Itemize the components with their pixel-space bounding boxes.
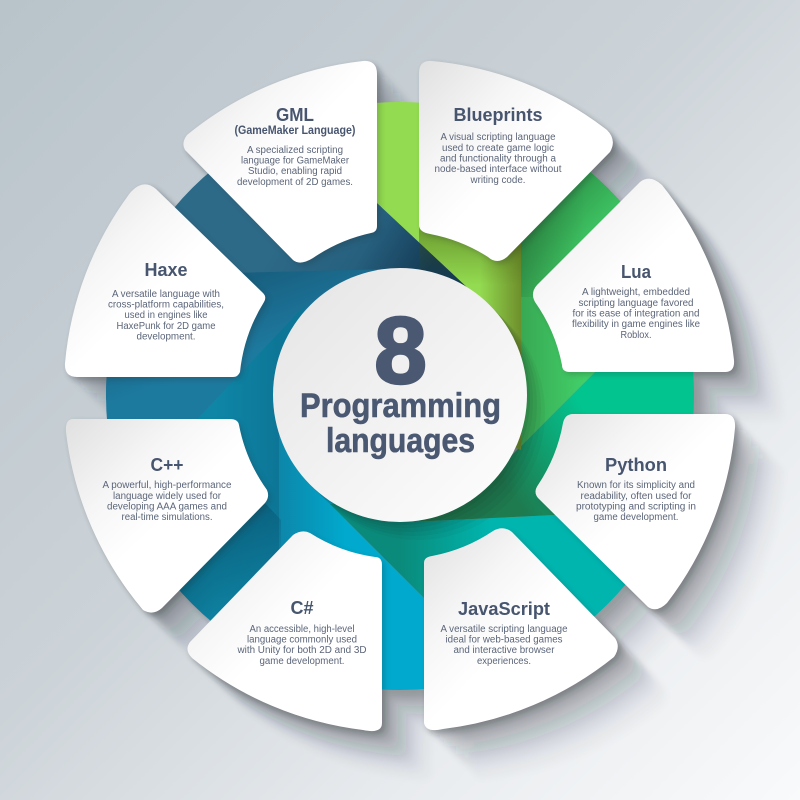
description: C#: with Unity for both 2D and 3D	[236, 645, 366, 656]
segment: bright blue (C#)	[279, 434, 424, 690]
card: Blueprints	[419, 61, 613, 261]
central hub	[273, 268, 527, 522]
description: JavaScript: A versatile scripting language	[440, 624, 568, 635]
description: Haxe: HaxePunk for 2D game	[116, 321, 216, 332]
segment: lime (Blueprints)	[377, 102, 521, 450]
description: GML: development of 2D games.	[237, 177, 353, 188]
description: Python: game development.	[594, 512, 678, 523]
description: Python: prototyping and scripting in	[576, 502, 696, 512]
heading: Lua: Lua	[621, 262, 652, 282]
description: C++: real-time simulations.	[122, 512, 212, 523]
description: Python	[576, 480, 696, 523]
description: C++	[102, 480, 232, 523]
segment: teal (JavaScript)	[330, 504, 626, 616]
heading: GML: GML	[276, 105, 314, 125]
hub shadow	[276, 271, 545, 540]
description: Blueprints: A visual scripting language	[440, 132, 556, 143]
subheading: (GameMaker Language)	[234, 123, 356, 137]
heading: Blueprints: Blueprints	[454, 105, 542, 125]
description: C++: developing AAA games and	[107, 502, 227, 512]
description: Lua: Roblox.	[620, 330, 652, 341]
big number: 8	[374, 298, 427, 404]
segment: dark blue (GML)	[106, 174, 466, 400]
heading: Python: Python	[605, 455, 667, 475]
card: GML	[183, 61, 377, 263]
description: Haxe: development.	[136, 332, 196, 342]
description: Blueprints: node-based interface without	[434, 164, 562, 175]
description: Lua: A lightweight, embedded	[582, 287, 690, 298]
description: JavaScript	[440, 624, 568, 667]
description: Blueprints	[434, 132, 562, 186]
hub title	[300, 387, 501, 460]
description: JavaScript: experiences.	[477, 656, 531, 667]
coloured pinwheel	[106, 102, 694, 690]
description: GML	[237, 145, 353, 188]
description: GML: language for GameMaker	[241, 156, 350, 166]
card: Haxe	[65, 184, 265, 377]
hub disc	[273, 268, 527, 522]
description: C#: An accessible, high-level	[250, 624, 354, 635]
description: Haxe: A versatile language with	[112, 289, 220, 300]
description: Python: Known for its simplicity and	[577, 480, 695, 491]
description: C#	[236, 624, 366, 667]
description: Python: readability, often used for	[580, 491, 692, 502]
shading: Blueprints shadow on green	[521, 172, 620, 297]
card: Lua	[533, 179, 734, 372]
description: JavaScript: ideal for web-based games	[446, 634, 563, 646]
heading: C#: C#	[290, 598, 314, 618]
description: Haxe: cross-platform capabilities,	[108, 300, 224, 310]
segment: sea green (Python)	[419, 372, 694, 522]
description: Lua: for its ease of integration and	[572, 308, 700, 320]
description: Lua: flexibility in game engines like	[572, 319, 701, 330]
description: GML: A specialized scripting	[247, 145, 343, 156]
shading: C++ shadow on blue	[180, 503, 281, 618]
description: Lua	[572, 287, 701, 341]
description: C#: language commonly used	[247, 634, 357, 646]
card: JavaScript	[424, 528, 618, 730]
description: JavaScript: and interactive browser	[454, 645, 555, 656]
description: C#: game development.	[260, 656, 344, 667]
description: Blueprints: writing code.	[470, 175, 526, 186]
card: C#	[187, 531, 382, 731]
heading: C++: C++	[150, 455, 184, 475]
hub title: languages	[326, 422, 475, 460]
description: Haxe	[108, 289, 224, 342]
hub title: Programming	[300, 387, 501, 425]
description: C++: language widely used for	[113, 491, 222, 502]
card: Python	[536, 414, 735, 609]
shading: Blueprints shadow on lime	[419, 226, 521, 278]
segment: steel blue (Haxe)	[106, 270, 380, 419]
description: Blueprints: used to create game logic	[442, 143, 554, 154]
description: Blueprints: and functionality through a	[440, 154, 557, 164]
description: C++: A powerful, high-performance	[102, 480, 232, 491]
description: GML: Studio, enabling rapid	[248, 166, 342, 177]
segment: green (Lua)	[521, 172, 620, 446]
heading: Haxe: Haxe	[144, 260, 188, 280]
card: C++	[66, 419, 268, 613]
segment: deep blue (C++)	[180, 306, 305, 621]
description: Haxe: used in engines like	[124, 310, 208, 321]
heading: JavaScript: JavaScript	[458, 599, 550, 619]
card drop shadows	[68, 64, 738, 734]
description: Lua: scripting language favored	[578, 298, 694, 309]
